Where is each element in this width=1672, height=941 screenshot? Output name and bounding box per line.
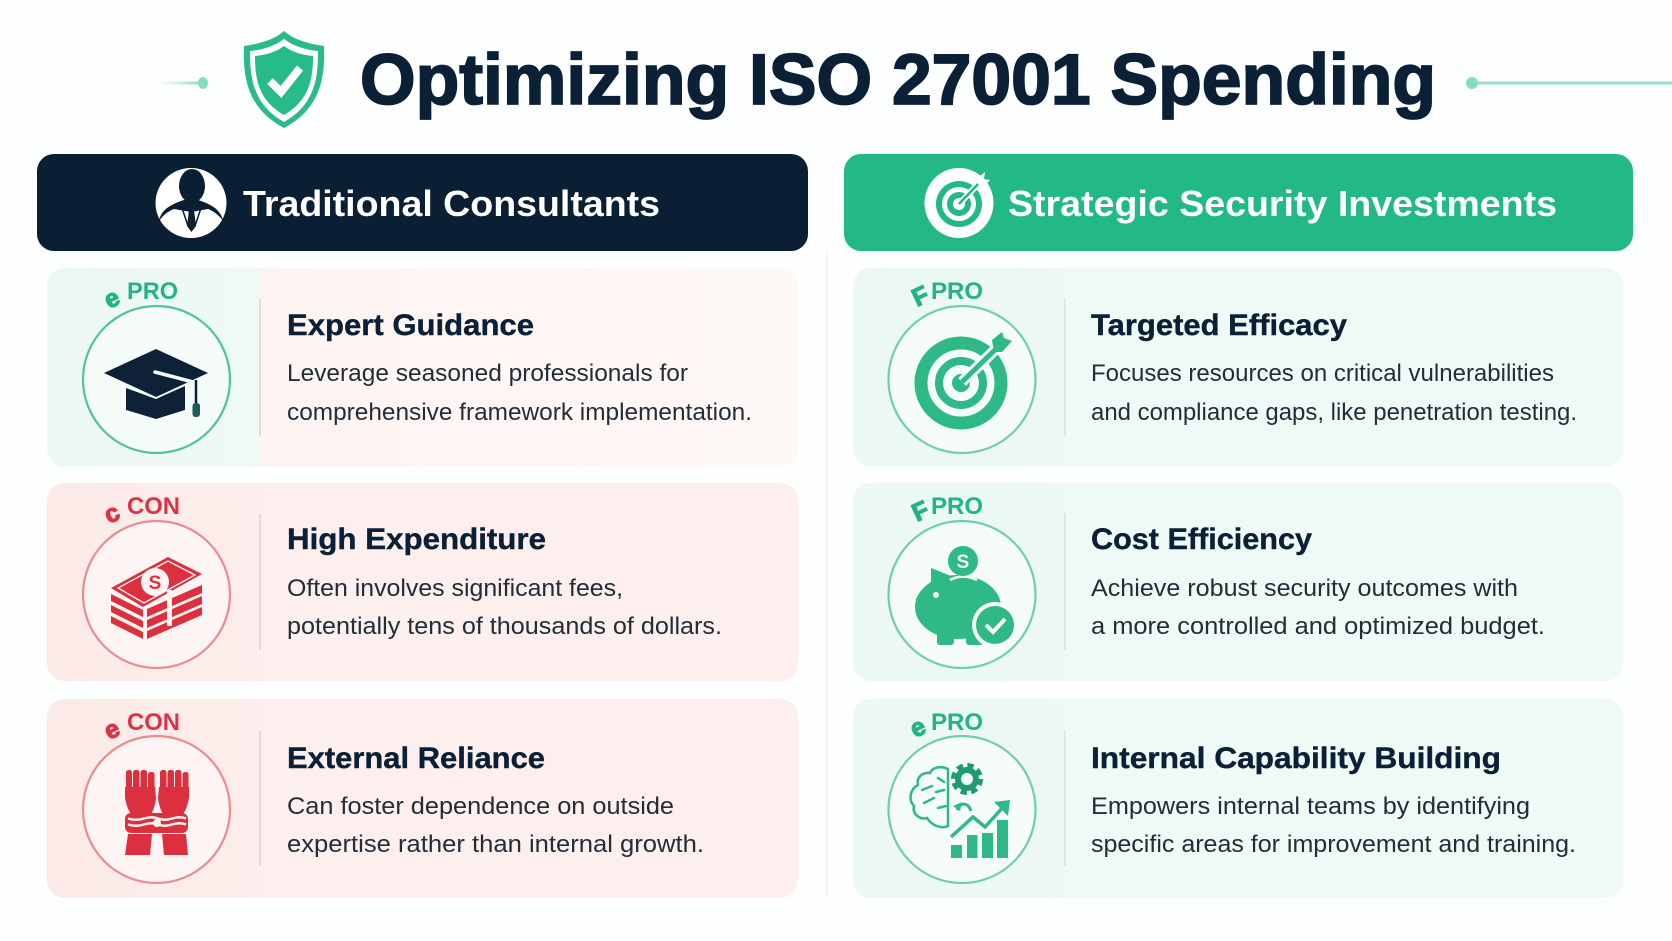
icon: graduation cap — [104, 349, 208, 419]
pro badge — [100, 278, 178, 314]
card description: Achieve robust security outcomes with — [1091, 575, 1518, 602]
column header: Strategic Security Investments — [844, 154, 1633, 251]
card description: Can foster dependence on outside — [287, 793, 674, 820]
panel: Internal Capability Building (pro) — [853, 699, 1623, 898]
card title: Internal Capability Building — [1091, 742, 1501, 775]
title: Optimizing ISO 27001 Spending — [360, 41, 1436, 120]
icon: consultant person — [156, 168, 226, 238]
pro badge: PRO — [931, 709, 983, 736]
panel: External Reliance (con) — [47, 699, 798, 898]
card description: and compliance gaps, like penetration testing. — [1091, 399, 1577, 426]
icon: brain, gear and growth chart — [911, 766, 1010, 858]
icon: piggy bank with coin and check — [915, 546, 1018, 648]
card description — [1091, 360, 1577, 426]
pro badge: F — [908, 281, 933, 312]
icon: target — [924, 168, 994, 238]
card description — [1091, 793, 1576, 858]
header text: Traditional Consultants — [243, 183, 660, 224]
card description: specific areas for improvement and training. — [1091, 831, 1576, 858]
pro badge — [908, 493, 983, 527]
panel: High Expenditure (con) — [47, 483, 798, 681]
pro badge: e — [100, 283, 124, 314]
card title: Targeted Efficacy — [1091, 309, 1347, 342]
con badge — [100, 709, 180, 745]
con badge: CON — [127, 493, 180, 520]
pro badge: e — [906, 712, 930, 743]
card title: External Reliance — [287, 742, 545, 775]
con badge: c — [100, 498, 124, 529]
card description: Empowers internal teams by identifying — [1091, 793, 1530, 820]
icon: shield with check — [244, 31, 324, 128]
pro badge: PRO — [931, 278, 983, 305]
title banner — [160, 31, 1672, 128]
card description: a more controlled and optimized budget. — [1091, 613, 1545, 640]
card description: Focuses resources on critical vulnerabilities — [1091, 360, 1554, 387]
card description — [287, 360, 752, 426]
card title: High Expenditure — [287, 523, 546, 556]
panel: Targeted Efficacy (pro) — [853, 268, 1623, 467]
panel: Expert Guidance (pro) — [47, 268, 798, 467]
panel: Cost Efficiency (pro) — [853, 483, 1623, 681]
header text: Strategic Security Investments — [1008, 183, 1557, 224]
pro badge: F — [908, 496, 933, 527]
card description — [287, 575, 722, 640]
pro badge — [908, 278, 983, 312]
card description — [287, 793, 704, 858]
con badge — [100, 493, 180, 529]
column header: Traditional Consultants — [37, 154, 808, 251]
icon: bound hands — [125, 770, 189, 855]
card description: expertise rather than internal growth. — [287, 831, 704, 858]
card title: Cost Efficiency — [1091, 523, 1312, 556]
card description: comprehensive framework implementation. — [287, 399, 752, 426]
icon: stack of money: S — [149, 573, 161, 594]
card title: Expert Guidance — [287, 309, 534, 342]
icon: target with arrow — [921, 332, 1012, 423]
card description: Leverage seasoned professionals for — [287, 360, 688, 387]
card description: Often involves significant fees, — [287, 575, 623, 602]
con badge: CON — [127, 709, 180, 736]
con badge: e — [100, 714, 124, 745]
pro badge — [906, 709, 983, 743]
card description: potentially tens of thousands of dollars. — [287, 613, 722, 640]
pro badge: PRO — [127, 278, 178, 305]
pro badge: PRO — [931, 493, 983, 520]
card description — [1091, 575, 1545, 640]
icon: piggy bank with coin and check: S — [957, 552, 969, 573]
icon: stack of money — [111, 557, 202, 639]
